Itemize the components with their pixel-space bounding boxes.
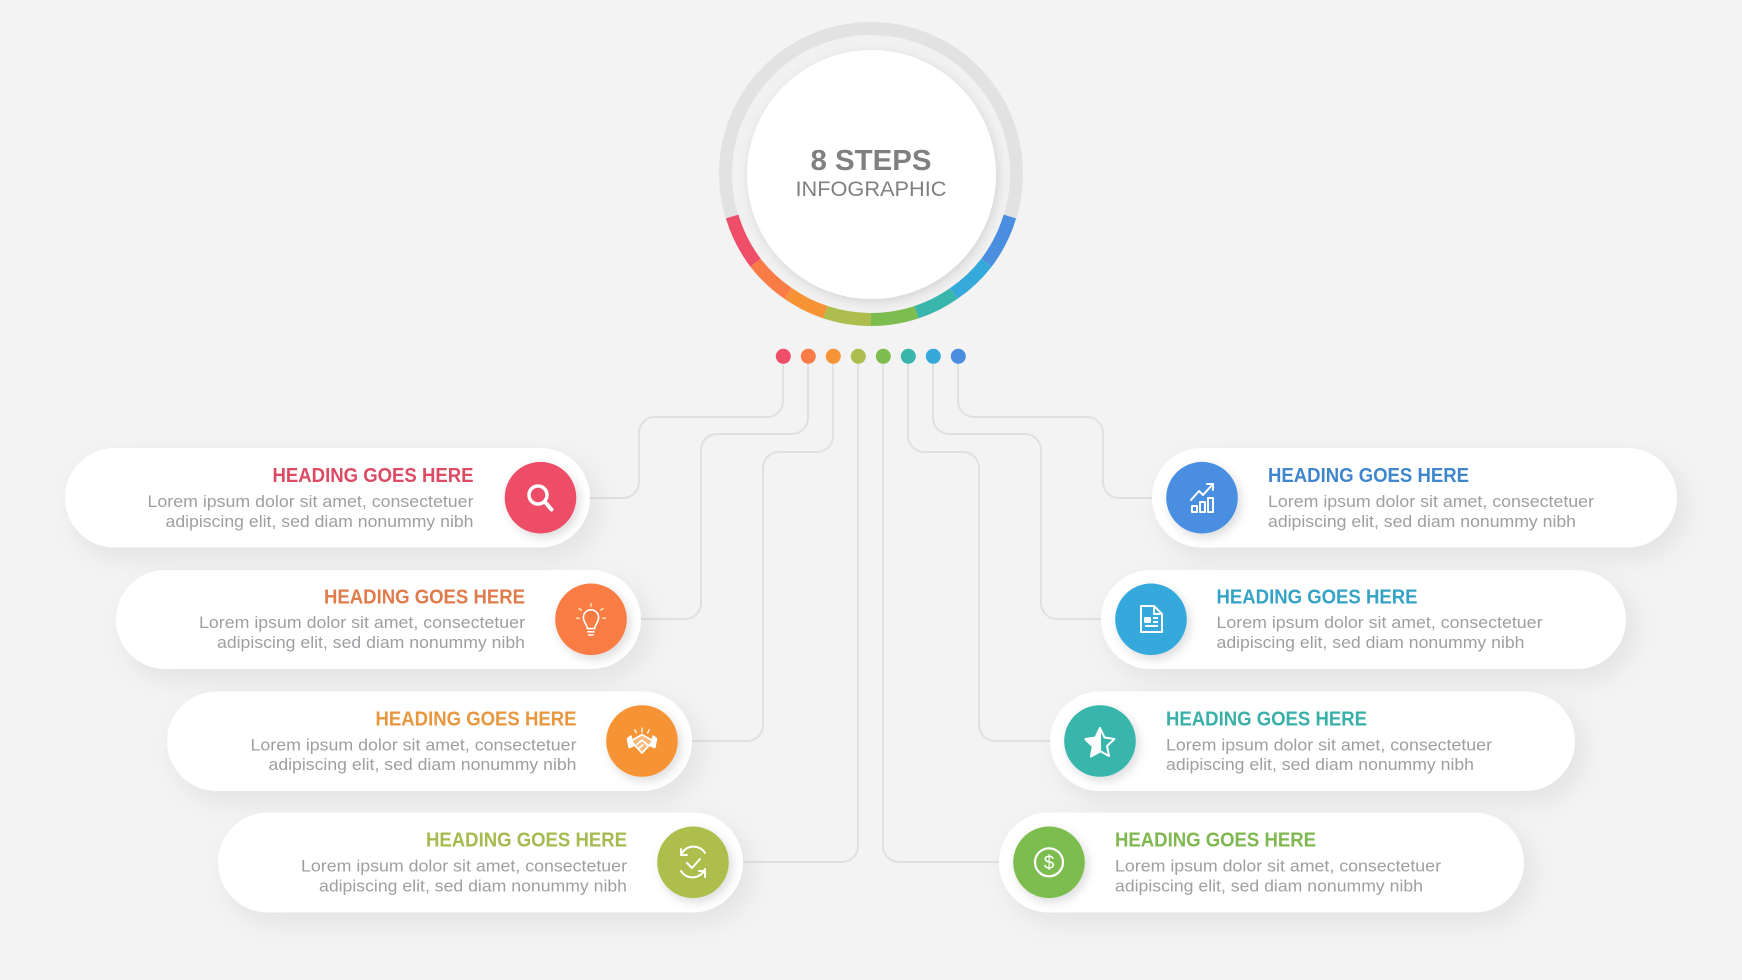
panel: step 6 teal <box>1050 692 1575 791</box>
body text: Lorem ipsum dolor sit amet, consectetuer <box>301 857 627 876</box>
heading: HEADING GOES HERE <box>324 587 525 609</box>
panel: step 8 blue <box>1152 448 1677 548</box>
body text: adipiscing elit, sed diam nonummy nibh <box>217 633 525 652</box>
coloured arc segments <box>732 216 1010 320</box>
panel: step 5 green <box>999 812 1524 912</box>
body text: adipiscing elit, sed diam nonummy nibh <box>268 755 576 774</box>
body text: Lorem ipsum dolor sit amet, consectetuer <box>1166 736 1492 755</box>
body text: adipiscing elit, sed diam nonummy nibh <box>1115 877 1423 896</box>
icon: handshake <box>628 728 656 753</box>
heading: HEADING GOES HERE <box>272 465 474 487</box>
body text: adipiscing elit, sed diam nonummy nibh <box>1268 512 1576 531</box>
panel: step 7 sky <box>1101 570 1626 669</box>
icon: light bulb <box>577 604 605 635</box>
heading: HEADING GOES HERE <box>1268 465 1469 487</box>
outer grey ring <box>726 28 1016 320</box>
icon: half star <box>1086 728 1114 756</box>
heading: HEADING GOES HERE <box>1115 830 1316 852</box>
heading: HEADING GOES HERE <box>1166 708 1367 730</box>
connector dots <box>776 349 966 364</box>
white inner disc <box>747 50 996 299</box>
panel: step 4 lime <box>218 812 743 912</box>
title: 8 STEPS <box>810 145 932 177</box>
body text: adipiscing elit, sed diam nonummy nibh <box>1216 633 1524 652</box>
icon: dollar coin <box>1035 848 1063 876</box>
panel: step 2 orange <box>116 570 641 669</box>
central circle <box>726 28 1016 320</box>
icon: magnifier <box>529 486 552 510</box>
body text: Lorem ipsum dolor sit amet, consectetuer <box>148 492 474 511</box>
icon: dollar coin: $ <box>1044 853 1055 874</box>
body text: Lorem ipsum dolor sit amet, consectetuer <box>199 613 525 632</box>
body text: Lorem ipsum dolor sit amet, consectetuer <box>1216 613 1543 632</box>
body text: Lorem ipsum dolor sit amet, consectetuer <box>250 736 577 755</box>
heading: HEADING GOES HERE <box>426 830 627 852</box>
body text: Lorem ipsum dolor sit amet, consectetuer <box>1268 492 1594 511</box>
panel: step 1 red <box>65 448 590 548</box>
connector lines <box>590 356 1152 862</box>
heading: HEADING GOES HERE <box>1216 587 1418 609</box>
icon: document <box>1141 606 1162 632</box>
icon: cycle check <box>681 847 705 877</box>
heading: HEADING GOES HERE <box>376 708 576 730</box>
panel: step 3 amber <box>167 692 692 791</box>
icon: growth chart <box>1191 484 1213 512</box>
body text: adipiscing elit, sed diam nonummy nibh <box>166 512 474 531</box>
body text: adipiscing elit, sed diam nonummy nibh <box>319 877 627 896</box>
body text: Lorem ipsum dolor sit amet, consectetuer <box>1115 857 1441 876</box>
inner band <box>731 34 1011 314</box>
body text: adipiscing elit, sed diam nonummy nibh <box>1166 755 1474 774</box>
subtitle: INFOGRAPHIC <box>796 177 946 201</box>
